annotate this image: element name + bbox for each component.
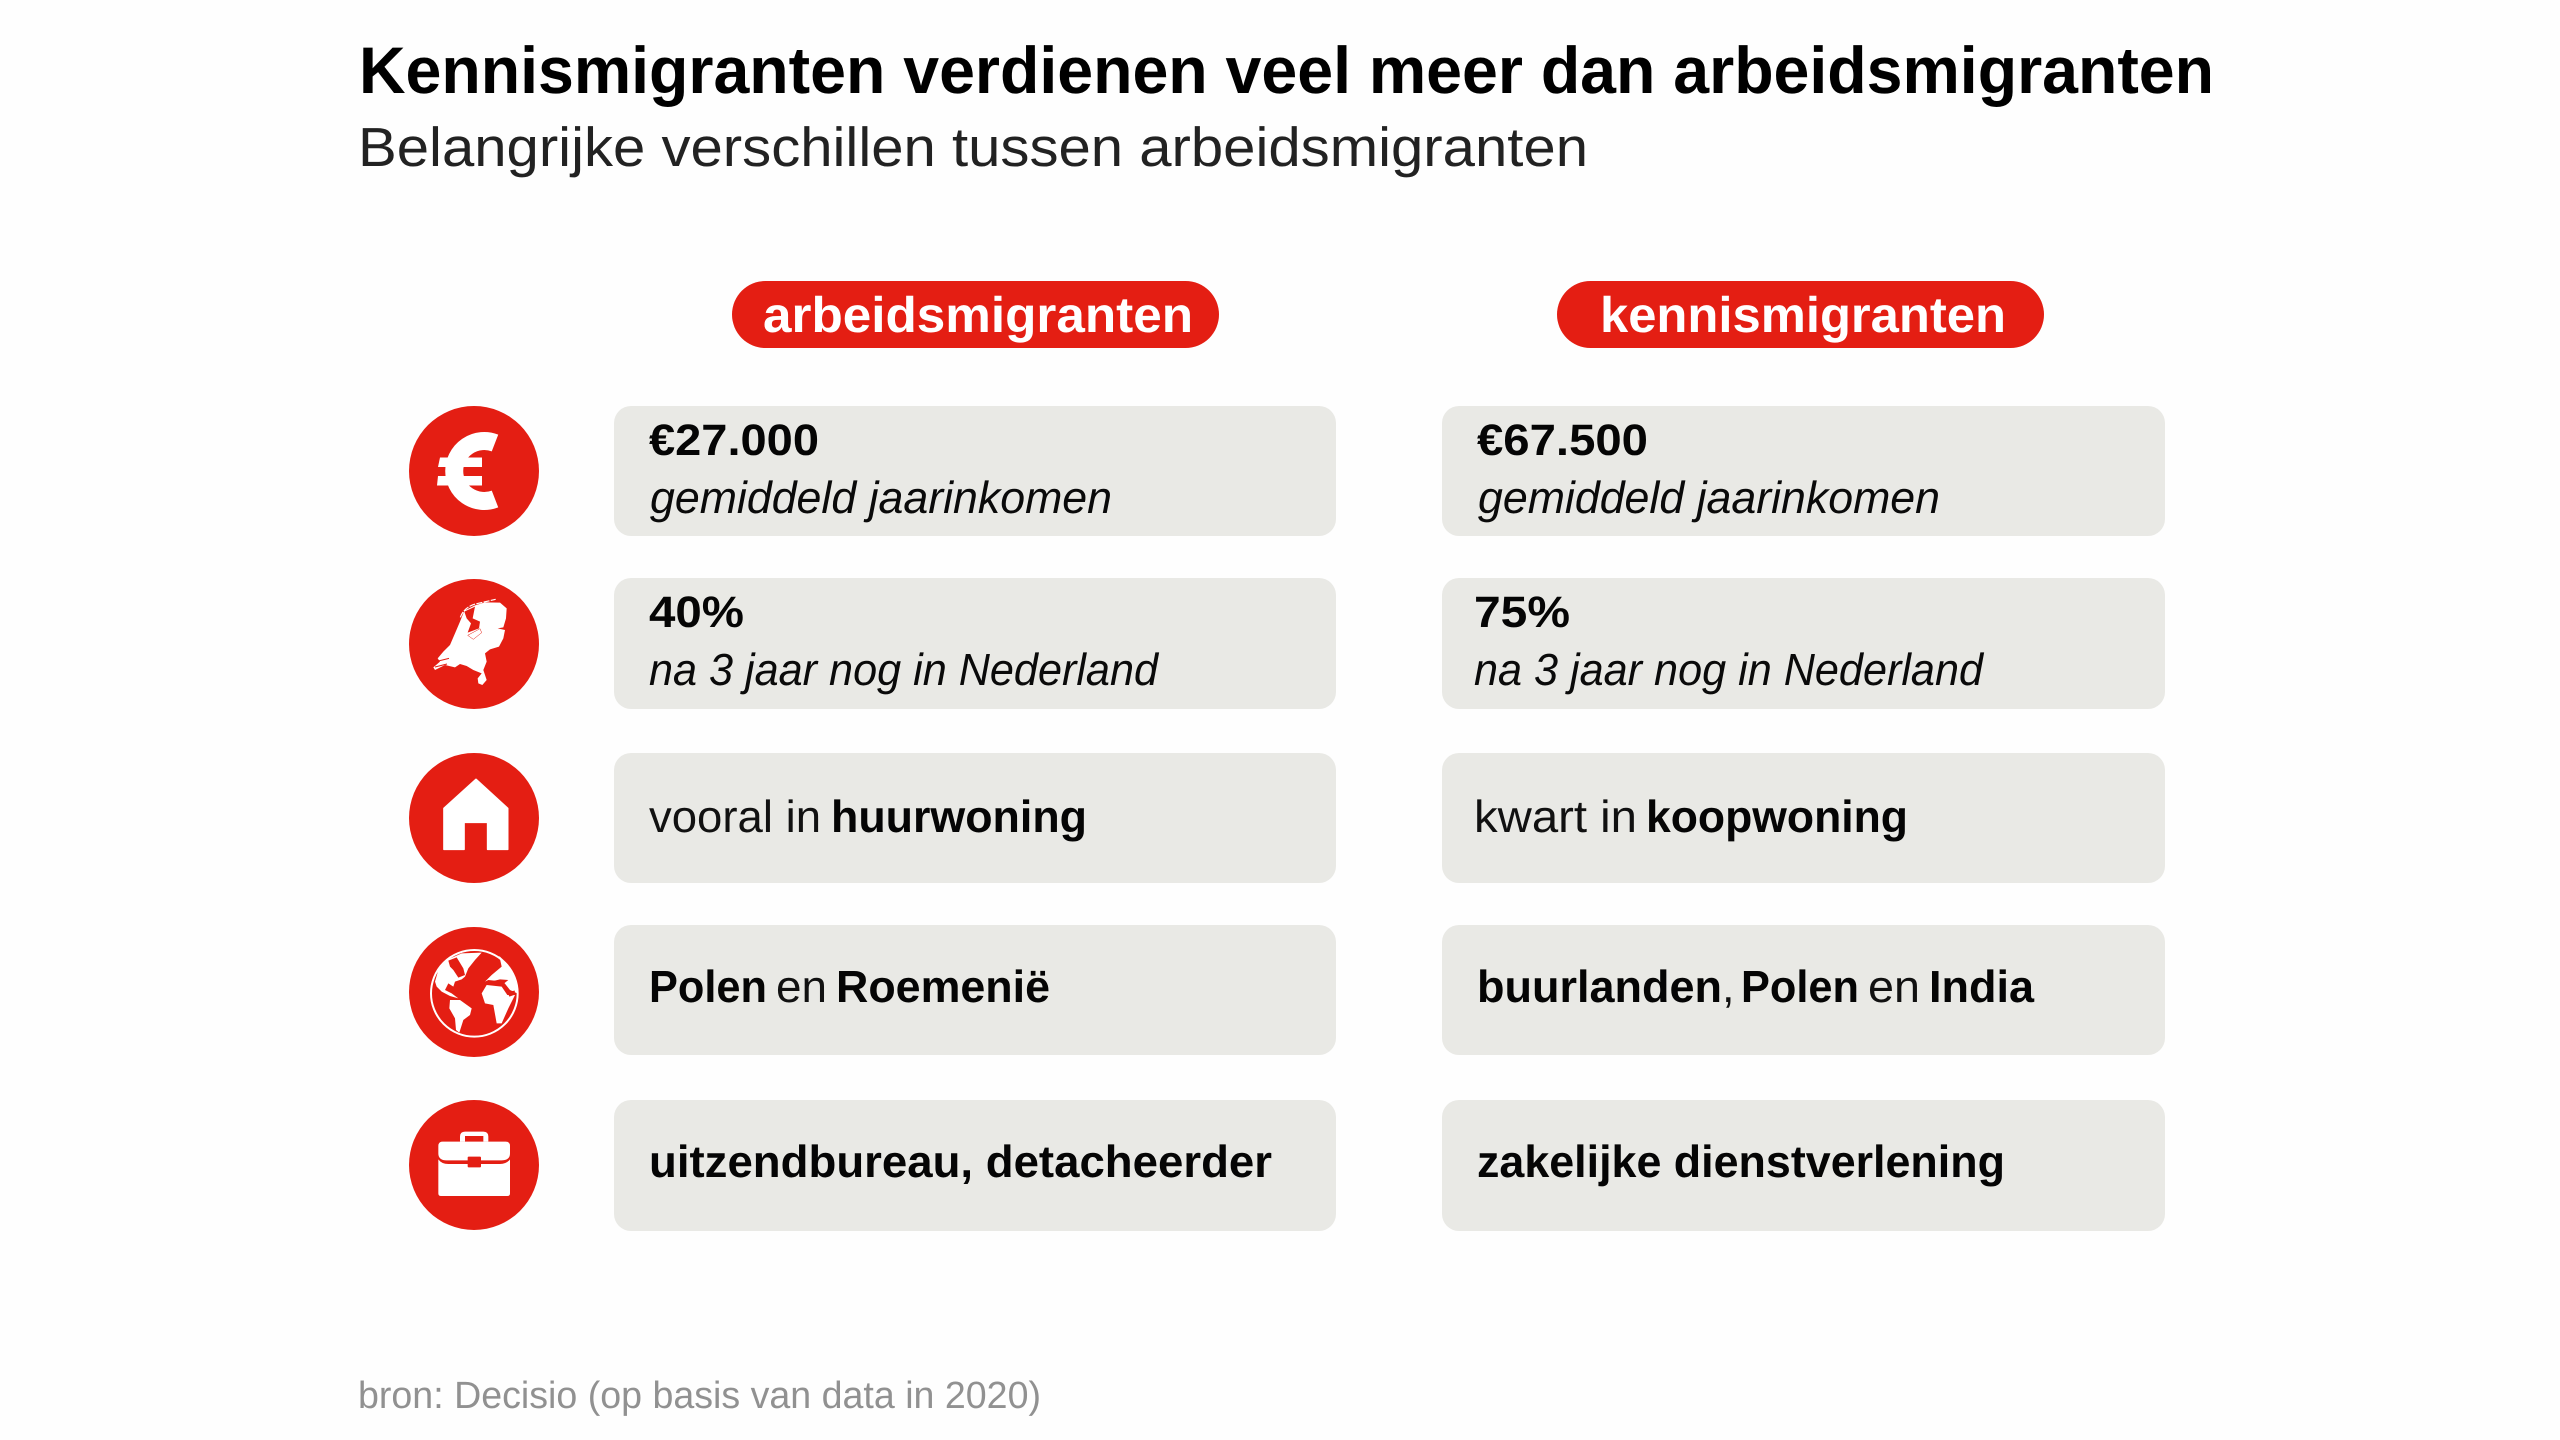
row 5 right: sector kennismigranten xyxy=(1442,1100,2165,1231)
row 5 left: sector arbeidsmigranten: uitzendbureau, detacheerder xyxy=(649,1136,1272,1187)
row 3 left: housing arbeidsmigranten: vooral in xyxy=(649,791,821,842)
row 3 right: housing kennismigranten: kwart in xyxy=(1474,791,1637,842)
row 4 right: origin kennismigranten: , xyxy=(1722,961,1735,1012)
row 2 right: retention kennismigranten: na 3 jaar nog in Nederland xyxy=(1474,644,1985,695)
row 2 left: retention arbeidsmigranten: 40% xyxy=(649,588,744,637)
row 3 right: housing kennismigranten xyxy=(1442,753,2165,883)
row 1 right: income kennismigranten: €67.500 xyxy=(1477,416,1648,465)
icon: euro xyxy=(409,406,539,536)
row 5 left: sector arbeidsmigranten xyxy=(614,1100,1336,1231)
title: Kennismigranten verdienen veel meer dan arbeidsmigranten xyxy=(359,33,2214,107)
icon: map of the Netherlands xyxy=(409,579,539,709)
row 3 right: housing kennismigranten: koopwoning xyxy=(1646,791,1908,842)
column header: kennismigranten xyxy=(1557,281,2044,348)
icon: globe xyxy=(409,927,539,1057)
row 4 right: origin kennismigranten: en xyxy=(1868,961,1920,1012)
row 3 left: housing arbeidsmigranten: huurwoning xyxy=(831,791,1087,842)
row 4 left: origin arbeidsmigranten: en xyxy=(776,961,827,1012)
row 2 right: retention kennismigranten: 75% xyxy=(1474,588,1570,637)
row 4 left: origin arbeidsmigranten xyxy=(614,925,1336,1055)
row 2 right: retention kennismigranten xyxy=(1442,578,2165,709)
row 1 left: income arbeidsmigranten: gemiddeld jaarinkomen xyxy=(650,472,1112,523)
row 3 left: housing arbeidsmigranten xyxy=(614,753,1336,883)
row 4 right: origin kennismigranten xyxy=(1442,925,2165,1055)
subtitle: Belangrijke verschillen tussen arbeidsmigranten xyxy=(358,116,1588,178)
icon: briefcase xyxy=(409,1100,539,1230)
row 1 right: income kennismigranten: gemiddeld jaarinkomen xyxy=(1478,472,1940,523)
row 4 right: origin kennismigranten: India xyxy=(1929,961,2035,1012)
row 1 left: income arbeidsmigranten: €27.000 xyxy=(649,416,819,465)
row 2 left: retention arbeidsmigranten xyxy=(614,578,1336,709)
row 4 left: origin arbeidsmigranten: Polen xyxy=(649,961,767,1012)
column header: arbeidsmigranten: arbeidsmigranten xyxy=(763,287,1193,343)
column header: kennismigranten: kennismigranten xyxy=(1600,287,2006,343)
row 4 right: origin kennismigranten: buurlanden xyxy=(1477,961,1722,1012)
row 2 left: retention arbeidsmigranten: na 3 jaar nog in Nederland xyxy=(649,644,1160,695)
row 4 left: origin arbeidsmigranten: Roemenië xyxy=(836,961,1050,1012)
row 1 left: income arbeidsmigranten xyxy=(614,406,1336,536)
row 1 right: income kennismigranten xyxy=(1442,406,2165,536)
source note: bron: Decisio (op basis van data in 2020) xyxy=(358,1375,1041,1417)
row 4 right: origin kennismigranten: Polen xyxy=(1741,961,1859,1012)
icon: house xyxy=(409,753,539,883)
row 5 right: sector kennismigranten: zakelijke dienstverlening xyxy=(1477,1136,2005,1187)
